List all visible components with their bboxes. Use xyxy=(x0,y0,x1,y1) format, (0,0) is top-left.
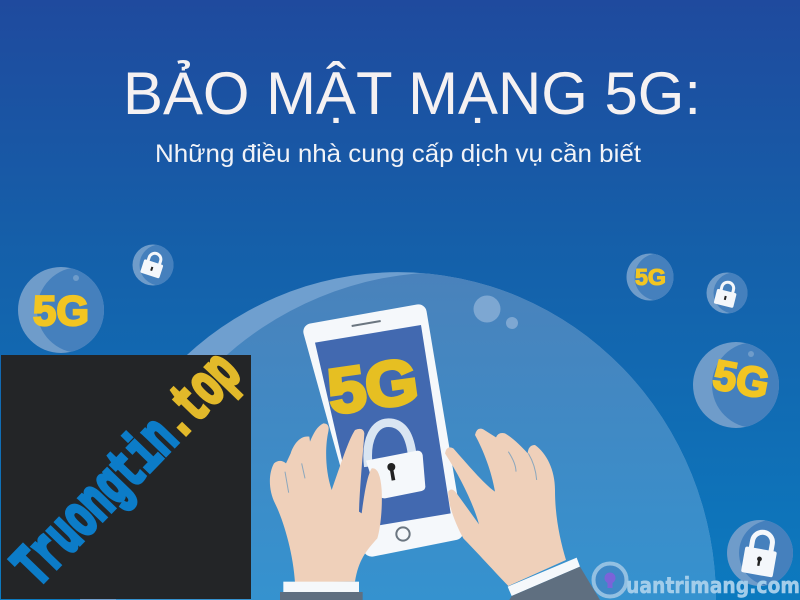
bubble: 5G large right: 5G xyxy=(709,351,773,408)
bubble: 5G large right xyxy=(693,342,779,428)
bubble: lock top left xyxy=(132,244,174,286)
right hand finger creases xyxy=(508,452,537,480)
quantrimang logo watermark xyxy=(594,564,800,599)
bubble: lock top right xyxy=(706,272,748,314)
bubble: 5G left: 5G xyxy=(33,287,89,334)
right cuff and sleeve xyxy=(508,558,600,600)
phone speaker xyxy=(352,321,381,326)
left hand xyxy=(270,423,382,583)
title: BẢO MẬT MẠNG 5G: xyxy=(123,60,701,127)
bubble: 5G top right xyxy=(626,254,674,300)
phone screen xyxy=(315,325,451,526)
large dome bubble xyxy=(80,272,776,600)
watermark box: Truongtin.top xyxy=(2,341,256,600)
bubble: lock bottom right xyxy=(727,520,800,586)
phone and hands illustration xyxy=(270,313,600,600)
right hand xyxy=(445,429,566,586)
phone body xyxy=(312,313,455,548)
phone home button xyxy=(396,527,410,541)
bubble: 5G top right: 5G xyxy=(635,264,666,290)
left hand finger creases xyxy=(285,463,305,493)
bubble: 5G left xyxy=(18,267,104,353)
subtitle: Những điều nhà cung cấp dịch vụ cần biết xyxy=(155,140,641,168)
left cuff and sleeve xyxy=(280,582,363,600)
phone 5G label: 5G xyxy=(324,346,422,428)
phone padlock xyxy=(366,423,425,498)
